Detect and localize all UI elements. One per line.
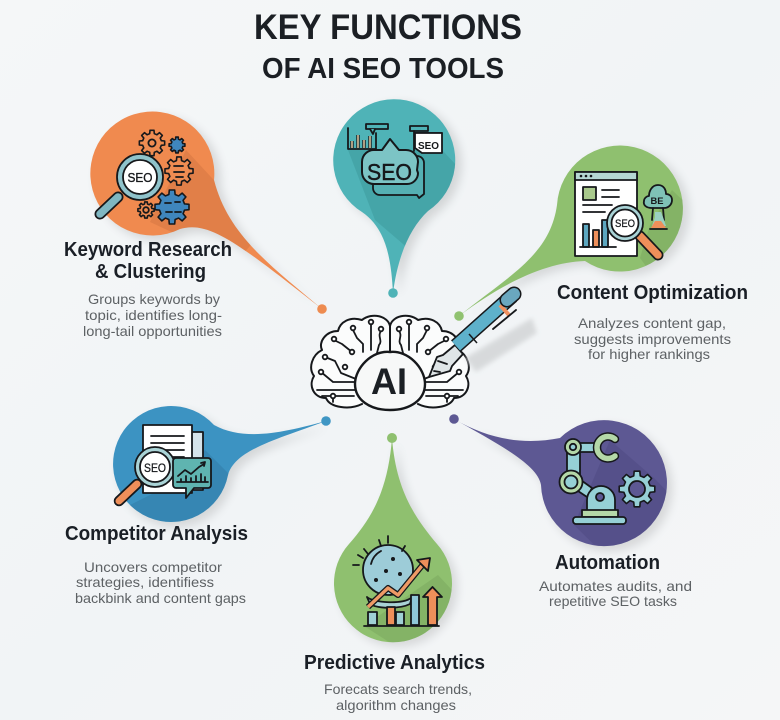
icon: crystal ball with growth chart xyxy=(353,536,442,626)
heading: predictive analytics: Predictive Analytics xyxy=(304,652,485,674)
pin: automation xyxy=(449,414,667,546)
icon: magnifier and gears: SEO xyxy=(128,170,152,185)
icon: seo speech bubbles and charts: SEO xyxy=(367,159,412,185)
text: automation: repetitive SEO tasks xyxy=(549,593,677,609)
icon: web page with seo magnifier xyxy=(575,172,672,256)
brain xyxy=(311,316,469,407)
panel: content optimization xyxy=(454,146,748,362)
pin: competitor analysis xyxy=(113,406,331,522)
text: content optimization: for higher rankings xyxy=(588,346,710,362)
central ai brain with pen xyxy=(311,294,537,410)
heading: keyword research xyxy=(64,239,232,283)
heading: content optimization: Content Optimization xyxy=(557,282,748,304)
icon: seo speech bubbles and charts: SEO xyxy=(418,141,439,152)
pen xyxy=(429,294,516,377)
title xyxy=(254,8,522,85)
text: keyword research: topic, identifies long- xyxy=(85,307,222,323)
panel: seo xyxy=(333,99,475,298)
text: competitor analysis: strategies, identifiess xyxy=(76,574,214,590)
icon: web page with seo magnifier: SEO xyxy=(615,218,635,230)
ai badge: AI xyxy=(371,361,407,402)
heading: keyword research: & Clustering xyxy=(95,261,206,283)
panel: automation xyxy=(449,414,692,609)
text: keyword research xyxy=(83,291,222,339)
icon: seo speech bubbles and charts xyxy=(348,124,442,198)
pen shadow xyxy=(465,318,537,372)
text: competitor analysis: Uncovers competitor xyxy=(84,559,222,575)
text: predictive analytics xyxy=(324,681,472,713)
pin: predictive analytics xyxy=(334,433,452,642)
text: keyword research: long-tail opportunities xyxy=(83,323,222,339)
text: automation xyxy=(539,578,692,609)
text: competitor analysis: backbink and content gaps xyxy=(75,590,246,606)
pin: content optimization xyxy=(454,146,705,321)
panel: keyword research xyxy=(64,112,328,339)
icon: web page with seo magnifier: BE xyxy=(650,196,664,206)
text: competitor analysis xyxy=(75,559,246,606)
text: content optimization xyxy=(574,315,731,362)
icon: robot arm and gear xyxy=(560,437,655,524)
text: automation: Automates audits, and xyxy=(539,578,692,594)
text: predictive analytics: algorithm changes xyxy=(336,697,456,713)
heading: keyword research: Keyword Research xyxy=(64,239,232,261)
text: predictive analytics: Forecats search trends, xyxy=(324,681,472,697)
pin: keyword research xyxy=(90,112,327,314)
heading: automation: Automation xyxy=(555,552,660,574)
icon: document, seo magnifier and chart: SEO xyxy=(144,461,166,475)
panel: predictive analytics xyxy=(304,433,485,713)
icon: magnifier and gears xyxy=(100,130,193,224)
panel: competitor analysis xyxy=(65,406,331,606)
text: content optimization: suggests improvements xyxy=(574,331,731,347)
title: KEY FUNCTIONS xyxy=(254,8,522,47)
text: content optimization: Analyzes content gap, xyxy=(578,315,726,331)
heading: competitor analysis: Competitor Analysis xyxy=(65,523,248,545)
ai badge xyxy=(355,352,425,410)
text: keyword research: Groups keywords by xyxy=(88,291,220,307)
title: OF AI SEO TOOLS xyxy=(262,53,504,85)
pin: seo xyxy=(333,99,456,298)
icon: document, seo magnifier and chart xyxy=(119,425,211,501)
